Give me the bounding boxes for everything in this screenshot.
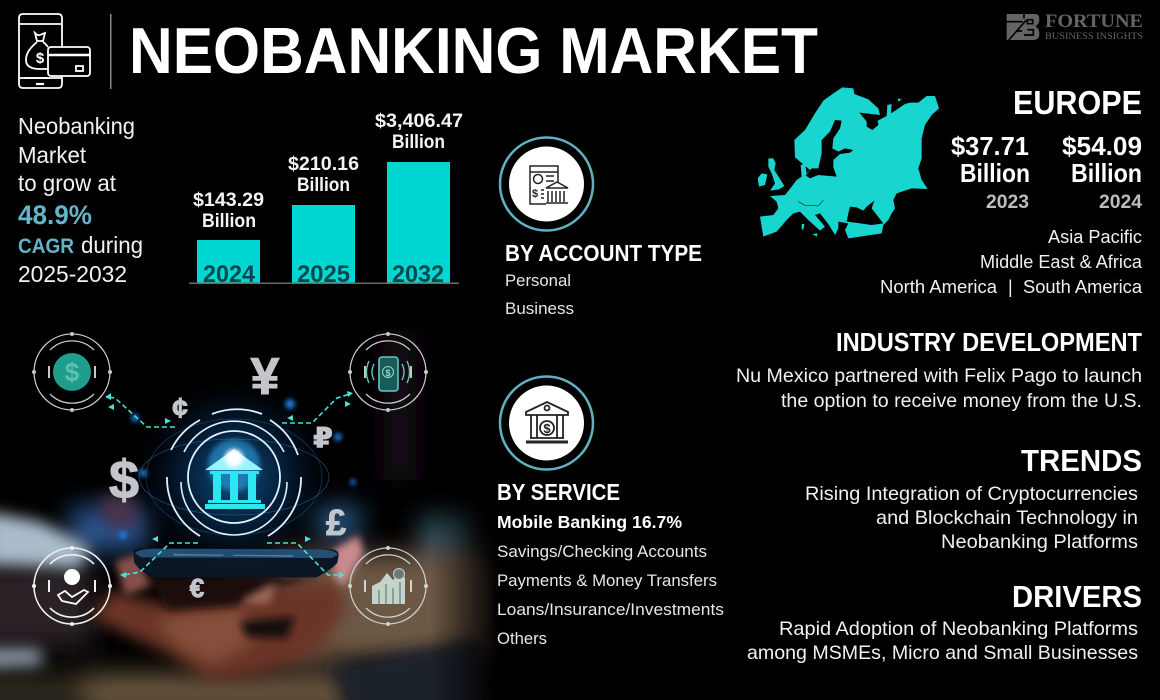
currency symbols: $ (109, 450, 139, 510)
icon ring: coin: $ (65, 357, 80, 387)
icon: service bank (500, 376, 593, 470)
growth statement: Market (18, 142, 87, 168)
other regions list: Asia Pacific (1048, 227, 1142, 247)
segment: by service: Payments & Money Transfers (497, 571, 717, 590)
segment: by account type: BY ACCOUNT TYPE (505, 240, 702, 266)
segment: by account type: Business (505, 299, 574, 318)
currency symbols: £ (326, 502, 346, 543)
growth statement: 48.9% (18, 200, 92, 230)
regional stats: Europe: EUROPE (1013, 84, 1142, 121)
growth statement (18, 113, 143, 287)
trends: TRENDS (1021, 443, 1142, 478)
drivers: Rapid Adoption of Neobanking Platforms (779, 618, 1138, 640)
bar chart: market size: 2025 (297, 261, 350, 288)
segment: by service: Mobile Banking 16.7% (497, 512, 682, 532)
other regions list (880, 227, 1143, 297)
logo: Fortune Business Insights: FORTUNE (1045, 11, 1143, 32)
growth statement: CAGR (18, 235, 74, 258)
bar chart: market size: 2024 (203, 261, 256, 288)
regional stats: Europe: $37.71 (951, 131, 1029, 161)
header icon: phone, money bag and card: $ (36, 50, 45, 67)
icon ring: mobile payment (348, 332, 428, 412)
growth statement: Neobanking (18, 113, 135, 139)
other regions list: | (1008, 277, 1013, 297)
other regions list: South America (1023, 277, 1143, 297)
segment: by account type: Personal (505, 271, 571, 290)
industry development (736, 327, 1142, 412)
regional stats: Europe: Billion (1071, 158, 1142, 188)
icon: account type: $ (532, 188, 538, 200)
bar chart: market size (189, 110, 463, 288)
currency symbols: ¥ (251, 348, 280, 406)
map: Europe (758, 87, 939, 238)
dashed connector arrows (105, 391, 353, 578)
icon: service bank: $ (543, 421, 551, 436)
bar chart: market size: Billion (392, 131, 445, 153)
icon: account type (500, 138, 593, 230)
segment: by service: Others (497, 629, 547, 648)
drivers: DRIVERS (1012, 579, 1142, 614)
growth statement: during (81, 232, 143, 258)
icon ring: hand with person (32, 546, 112, 626)
regional stats: Europe: Billion (960, 158, 1030, 188)
bar chart: market size: 2032 (392, 261, 444, 288)
currency symbols: ₽ (313, 422, 333, 453)
currency symbols: ¢ (172, 392, 188, 423)
segment: by account type (505, 240, 702, 318)
industry development: the option to receive money from the U.S. (781, 390, 1142, 412)
icon ring: coin (32, 332, 112, 412)
trends: Neobanking Platforms (941, 531, 1138, 553)
icon ring: mobile payment: $ (385, 368, 391, 378)
regional stats: Europe: 2023 (986, 192, 1029, 213)
trends: Rising Integration of Cryptocurrencies (805, 483, 1138, 505)
segment: by service (497, 479, 724, 648)
drivers: among MSMEs, Micro and Small Businesses (747, 642, 1138, 664)
growth statement: to grow at (18, 170, 117, 196)
growth statement: 2025-2032 (18, 261, 127, 287)
regional stats: Europe: 2024 (1099, 192, 1142, 213)
industry development: Nu Mexico partnered with Felix Pago to launch (736, 365, 1142, 387)
currency symbols: € (190, 573, 204, 603)
bar chart: market size: Billion (297, 174, 350, 196)
logo: Fortune Business Insights (1005, 11, 1143, 42)
photo: hand holding phone with holographic banking icons (0, 320, 507, 700)
bar chart: market size: $3,406.47 (375, 110, 463, 132)
title: NEOBANKING MARKET (129, 14, 818, 87)
other regions list: Middle East & Africa (980, 252, 1143, 272)
trends (805, 443, 1142, 553)
segment: by service: Loans/Insurance/Investments (497, 600, 724, 619)
bar chart: market size: $143.29 (193, 189, 264, 211)
regional stats: Europe: $54.09 (1062, 131, 1142, 161)
regional stats: Europe (951, 84, 1142, 213)
other regions list: North America (880, 277, 998, 297)
icon ring: growth chart (348, 546, 428, 626)
currency symbols (109, 348, 346, 603)
segment: by service: Savings/Checking Accounts (497, 542, 707, 561)
holographic bank emblem (119, 399, 356, 539)
trends: and Blockchain Technology in (876, 507, 1138, 529)
segment: by service: BY SERVICE (497, 479, 620, 505)
bar chart: market size: Billion (202, 210, 256, 232)
drivers (747, 579, 1142, 664)
bar chart: market size: $210.16 (288, 153, 359, 175)
header icon: phone, money bag and card (19, 14, 90, 88)
logo: Fortune Business Insights: BUSINESS INSIGHTS (1045, 32, 1143, 42)
